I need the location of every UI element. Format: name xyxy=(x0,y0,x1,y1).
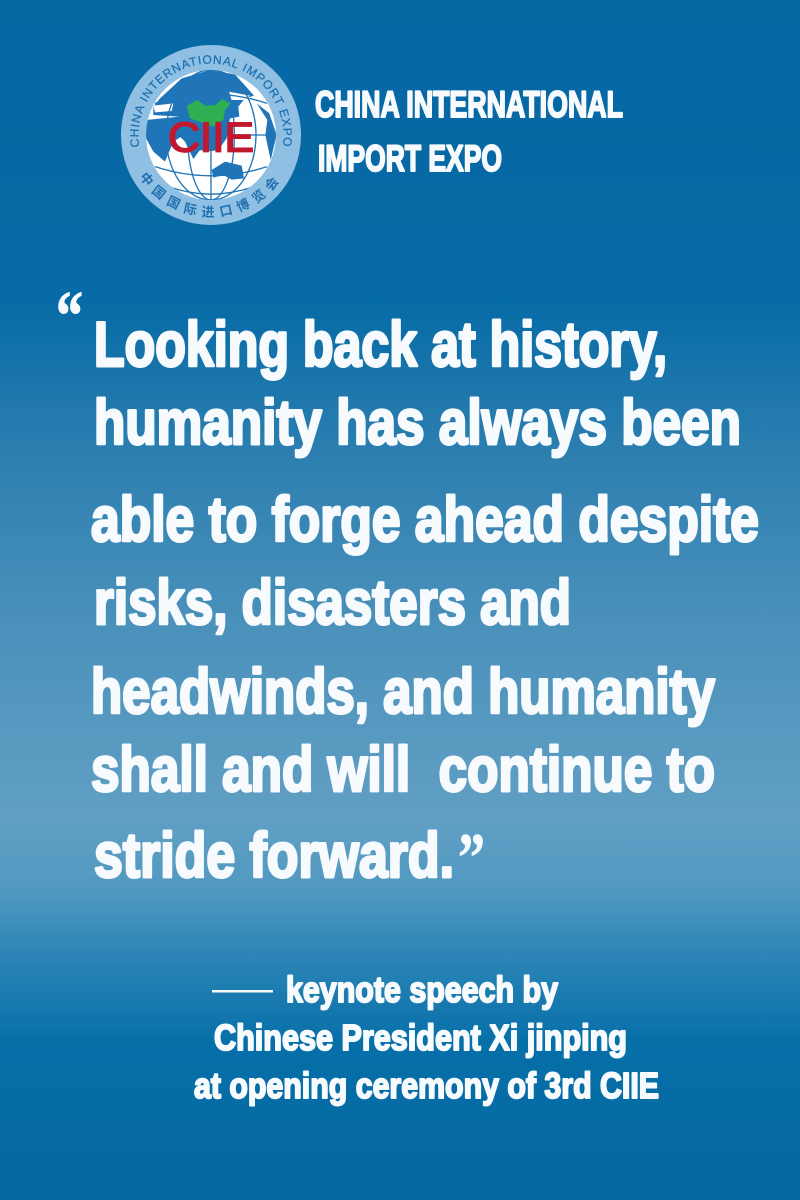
quote text: risks, disasters and xyxy=(94,568,571,638)
attribution text xyxy=(194,969,659,1106)
header title: IMPORT EXPO xyxy=(318,138,502,179)
logo: English ring text: CHINA INTERNATIONAL IMPORT EXPO xyxy=(130,55,292,147)
quote text xyxy=(91,310,759,891)
logo globe xyxy=(146,70,277,200)
attribution text: keynote speech by xyxy=(286,969,558,1010)
logo: CIIE red letters: CIIE xyxy=(168,113,254,160)
logo: Chinese ring text: 中国国际进口博览会 xyxy=(142,172,279,218)
attribution text: at opening ceremony of 3rd CIIE xyxy=(194,1065,659,1106)
quote text: Looking back at history, xyxy=(94,310,667,380)
attribution text: Chinese President Xi jinping xyxy=(214,1017,627,1058)
quote text: stride forward. xyxy=(94,821,454,891)
attribution dash xyxy=(212,990,273,992)
logo: green China map xyxy=(187,99,231,127)
closing quotation mark: ” xyxy=(458,820,485,897)
opening quotation mark: “ xyxy=(56,278,83,355)
header title xyxy=(315,84,623,179)
header title: CHINA INTERNATIONAL xyxy=(315,84,623,125)
logo: CIIE globe emblem xyxy=(121,45,301,225)
